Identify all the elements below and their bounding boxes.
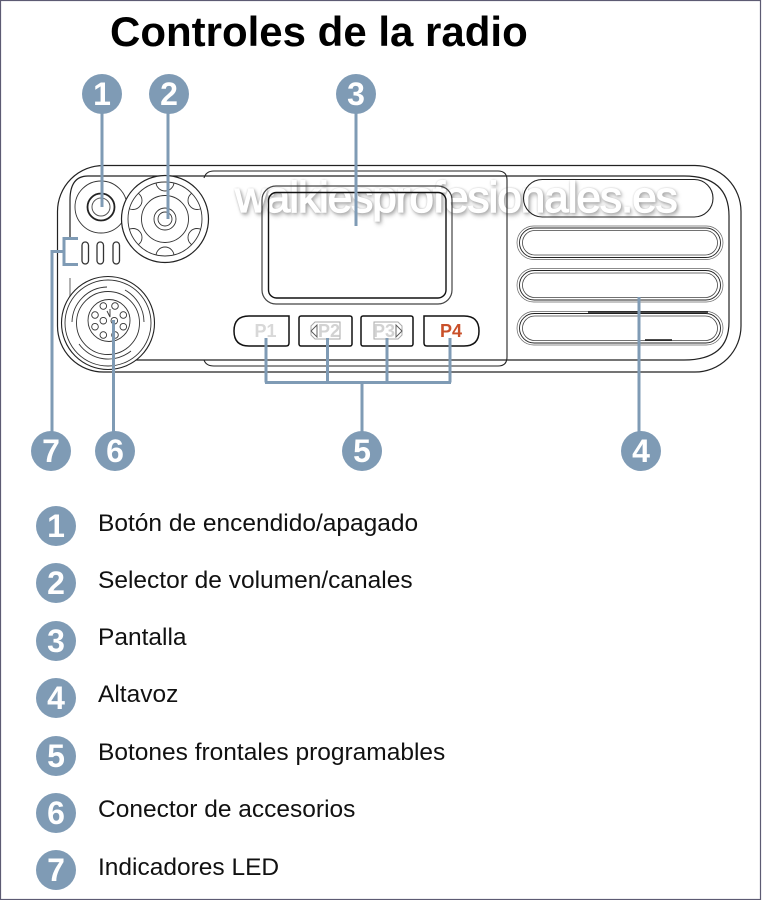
callout 2 (149, 74, 189, 114)
legend item 4: Altavoz (98, 681, 178, 708)
screen (262, 186, 452, 304)
programmable button P1: P1 (254, 321, 277, 341)
legend item 6: 6 (47, 795, 65, 831)
legend item 6 (36, 793, 355, 833)
watermark: walkiesprofesionales.es (235, 173, 677, 222)
legend item 3 (36, 621, 187, 661)
legend item 7 (36, 850, 279, 890)
legend item 4: 4 (47, 680, 65, 716)
power button (75, 181, 127, 233)
centre display panel (204, 171, 507, 366)
accessory connector (62, 276, 154, 370)
callout 7: 7 (42, 433, 60, 469)
LED indicators (82, 242, 120, 264)
legend item 1: 1 (47, 508, 65, 544)
callout 1 (82, 74, 122, 114)
callout 5 (342, 431, 382, 471)
callout 6: 6 (106, 433, 124, 469)
callout 6 (95, 431, 135, 471)
programmable button P3: P3 (373, 321, 395, 341)
programmable button P4 (424, 316, 479, 346)
legend item 5: 5 (47, 738, 65, 774)
programmable button P2 (299, 316, 352, 346)
legend item 1: Botón de encendido/apagado (98, 510, 418, 537)
legend item 3: Pantalla (98, 624, 187, 651)
callout 5: 5 (353, 433, 371, 469)
callout 2: 2 (160, 76, 178, 112)
callout leader lines (52, 94, 639, 451)
callout 3 (336, 74, 376, 114)
programmable button P3 (361, 316, 413, 346)
legend item 7: Indicadores LED (98, 854, 279, 881)
programmable button P1 (234, 316, 289, 346)
legend item 5 (36, 736, 445, 776)
legend item 5: Botones frontales programables (98, 739, 445, 766)
volume and channel knob (122, 173, 208, 265)
legend item 2: 2 (47, 565, 65, 601)
legend item 4 (36, 678, 178, 718)
programmable button P4: P4 (440, 321, 462, 341)
callout 3: 3 (347, 76, 365, 112)
legend item 3: 3 (47, 623, 65, 659)
callout 1: 1 (93, 76, 111, 112)
callout 4 (621, 431, 661, 471)
radio body outline (58, 166, 741, 372)
programmable button P2: P2 (318, 321, 340, 341)
speaker grille (517, 180, 723, 345)
callout 4: 4 (632, 433, 650, 469)
title: Controles de la radio (110, 8, 528, 55)
callout 7 (31, 431, 71, 471)
radio front panel (58, 166, 741, 372)
legend item 1 (36, 506, 418, 546)
legend item 2: Selector de volumen/canales (98, 567, 413, 594)
legend item 6: Conector de accesorios (98, 796, 355, 823)
legend item 7: 7 (47, 852, 65, 888)
legend item 2 (36, 563, 413, 603)
